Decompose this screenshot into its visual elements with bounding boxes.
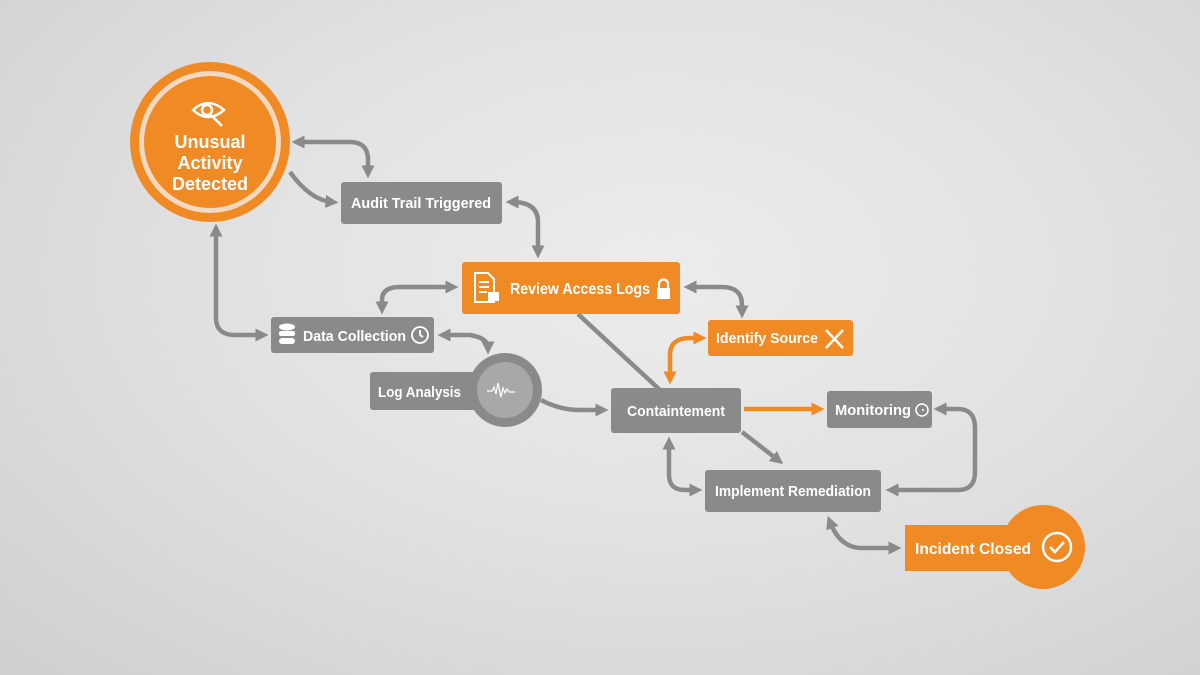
node: Implement Remediation bbox=[705, 470, 881, 512]
node: Implement Remediation: Implement Remediation bbox=[715, 483, 871, 500]
node: Containtement bbox=[611, 388, 741, 433]
node: Audit Trail Triggered bbox=[341, 182, 502, 224]
node: Unusual Activity Detected bbox=[130, 62, 290, 222]
node: Containtement: Containtement bbox=[627, 403, 725, 420]
icon: lock bbox=[657, 280, 670, 299]
connectors bbox=[216, 142, 975, 548]
node: Identify Source: Identify Source bbox=[716, 330, 818, 347]
node: Log Analysis bbox=[370, 353, 542, 427]
node: Log Analysis: Log Analysis bbox=[378, 384, 461, 401]
node: Unusual Activity Detected: Detected bbox=[172, 174, 248, 194]
node: Unusual Activity Detected: Activity bbox=[177, 153, 243, 173]
node: Unusual Activity Detected: Unusual bbox=[174, 132, 246, 152]
node: Incident Closed: Incident Closed bbox=[915, 541, 1031, 558]
icon: eye with magnifier bbox=[193, 103, 224, 126]
icon: database bbox=[279, 324, 295, 344]
icon: check bbox=[1043, 533, 1071, 561]
icon: document lock bbox=[475, 273, 494, 302]
node: Incident Closed bbox=[905, 505, 1085, 589]
icon: clock bbox=[412, 327, 428, 343]
node: Identify Source bbox=[708, 320, 853, 356]
node: Monitoring bbox=[827, 391, 932, 428]
node: Review Access Logs bbox=[462, 262, 680, 314]
node: Monitoring: Monitoring bbox=[835, 402, 911, 419]
node: Data Collection bbox=[271, 317, 434, 353]
node: Audit Trail Triggered: Audit Trail Triggered bbox=[351, 195, 491, 212]
node: Review Access Logs: Review Access Logs bbox=[510, 281, 650, 298]
node: Data Collection: Data Collection bbox=[303, 328, 406, 345]
icon: tools bbox=[826, 330, 843, 348]
